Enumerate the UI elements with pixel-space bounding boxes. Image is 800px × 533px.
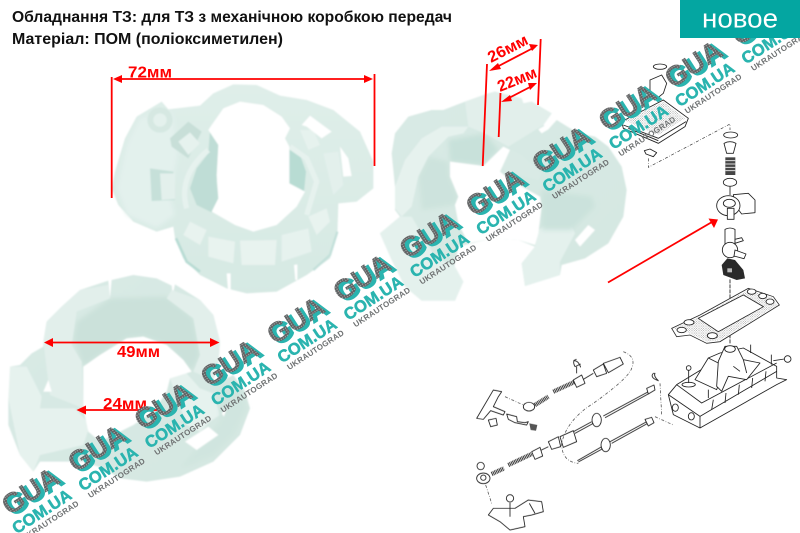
watermark unit: COM.UA [274,315,340,367]
watermark unit: GUA [62,418,131,478]
photo: plastic bushing, bottom view [8,275,250,482]
heading line 2: Матеріал: ПОМ (поліоксиметилен) [12,31,283,48]
watermark unit: UKRAUTOGRAD [285,328,346,372]
dimension: 26 mm and 22 mm: 26мм [485,32,531,67]
heading [12,9,452,48]
lower bracket [488,495,543,530]
watermark unit: UKRAUTOGRAD [219,371,280,415]
watermark unit: GUA [132,377,201,437]
diagram: shift lever [722,228,746,280]
watermark unit: UKRAUTOGRAD [484,200,545,244]
watermark unit: GUA [66,419,135,479]
watermark unit: GUA [596,78,665,138]
dashed routing lines [562,352,633,463]
watermark unit: GUA [265,291,334,351]
watermark unit: GUA [530,121,599,180]
watermark unit: GUA [331,249,400,309]
watermark unit: GUA [526,119,595,179]
photo: plastic bushing, side view [380,92,627,301]
watermark unit [59,417,147,501]
watermark unit: GUA [198,334,267,394]
watermark unit: GUA [460,162,529,222]
watermark unit [656,33,744,117]
dimension: 49 mm [44,338,220,361]
watermark unit: COM.UA [142,401,208,452]
watermark unit: COM.UA [672,59,738,111]
dimension: 72 mm: 72мм [128,64,172,82]
watermark unit: GUA [464,163,533,223]
watermark unit: GUA [0,462,69,522]
watermark unit: GUA [592,77,662,137]
upper cable [523,357,623,411]
watermark unit [722,0,800,74]
dimension: 24 mm: 24мм [103,396,147,413]
watermark unit: GUA [128,376,197,436]
watermark unit [0,460,81,533]
watermark unit: COM.UA [606,102,672,153]
watermark unit: GUA [397,206,466,266]
watermark unit [523,118,611,202]
diagram: top knob and pad [622,64,738,195]
hole of side bushing [450,147,542,245]
dimension: 26 mm and 22 mm [483,32,541,166]
badge: new [680,0,800,38]
dimension: 26 mm and 22 mm: 22мм [495,65,540,96]
watermark unit [125,374,213,459]
photo: plastic bushing, top view [112,84,373,293]
watermark unit: COM.UA [341,273,407,324]
watermark unit: UKRAUTOGRAD [617,115,677,158]
diagram: shifter housing [668,345,791,428]
watermark unit [191,332,280,416]
watermark unit: GUA [195,333,264,393]
watermark unit: UKRAUTOGRAD [153,414,213,457]
watermark unit [390,203,478,288]
dimension: 24 mm [76,396,157,414]
hole of bottom bushing [83,337,192,442]
watermark unit: COM.UA [75,443,141,495]
dimension: 49 mm: 49мм [117,344,160,361]
lower cable [477,385,655,484]
diagram: gasket plate [672,279,779,343]
diagram: gear shift exploded view [477,64,791,530]
hole of top bushing [208,102,305,232]
watermark unit: UKRAUTOGRAD [551,157,611,201]
watermark unit: COM.UA [407,230,473,281]
watermark unit: GUA [261,290,330,350]
top-left bracket [477,361,658,431]
watermark unit: UKRAUTOGRAD [683,72,744,116]
watermark unit [258,289,346,373]
watermark unit: GUA [662,35,732,95]
watermark unit: GUA [327,248,396,307]
watermark unit: COM.UA [473,187,539,239]
watermark unit: GUA [394,205,463,265]
watermark unit [589,75,677,160]
diagram: shift bushing part [717,193,755,219]
third cable [577,417,654,462]
arrow pointing to part in diagram [608,218,718,282]
watermark unit: UKRAUTOGRAD [86,456,147,500]
dimension: 72 mm [112,64,374,198]
watermark unit [324,246,412,330]
watermark unit: GUA [659,34,728,94]
badge: new: новое [702,4,778,34]
watermark unit: UKRAUTOGRAD [418,243,478,286]
watermark unit: COM.UA [208,358,274,410]
watermark unit: UKRAUTOGRAD [352,286,412,329]
heading line 1: Обладнання ТЗ: для ТЗ з механічною коробкою передач [12,9,452,26]
watermark unit: COM.UA [540,145,606,196]
diagram: cables and brackets [477,352,673,530]
watermark unit [457,161,545,245]
